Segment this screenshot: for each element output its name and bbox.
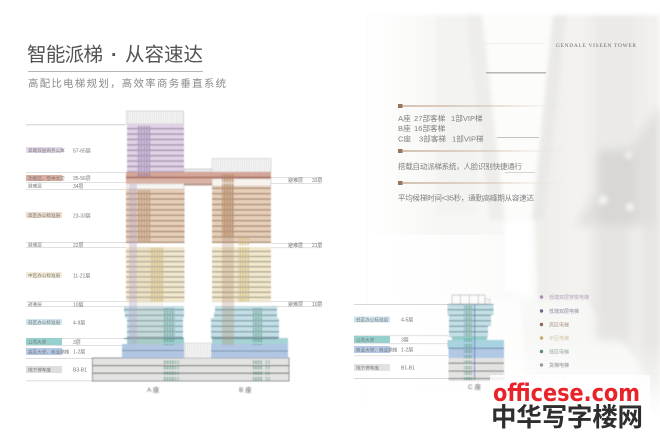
panel: corridor background photo [368, 15, 660, 440]
panel: left floor zone labels: 避难层 [28, 301, 42, 308]
panel: tower C labels: 低区办公标准层 [356, 316, 389, 324]
panel: left floor zone labels: 22层 [73, 243, 84, 249]
text block: elevator counts: 27部客梯 [414, 113, 446, 123]
watermark [490, 375, 650, 440]
legend: VIP电梯 [549, 376, 567, 382]
panel: left floor zone labels: 34层 [73, 184, 84, 190]
panel: left floor zone labels: B3-B1 [73, 368, 87, 374]
tower B tan zone [212, 186, 271, 243]
chart: tower C section [448, 295, 504, 391]
tower B lobby [211, 338, 288, 358]
watermark: 中华写字楼网 [491, 404, 643, 432]
text block: elevator counts: 3部客梯 [419, 134, 446, 144]
tower C elevator dots [464, 305, 472, 380]
elevator shaft A [129, 184, 137, 344]
tower C crown [452, 295, 490, 304]
title: 从容速达 [125, 44, 203, 66]
panel: left floor zone labels: 地下停车库 [28, 366, 51, 374]
chart: tower A and B section [92, 111, 289, 394]
text block: waiting time [398, 181, 562, 202]
elevator dots A upper mid [138, 190, 150, 243]
tower C lobby [448, 337, 504, 358]
panel: tower C labels: 1-2层 [401, 348, 413, 354]
panel: left floor zone labels: 低区办公标准层 [28, 319, 61, 326]
tower A tan zone [126, 189, 184, 243]
elevator dots B upper [222, 174, 234, 236]
panel: left floor zone labels: 3层 [73, 340, 81, 346]
text block: elevator counts: C座 [398, 134, 411, 144]
tower B cream zone [212, 247, 271, 302]
text block: dispatch system: 搭载自动派梯系统，人脸识别快捷通行 [398, 161, 522, 171]
text block: elevator counts: 1部VIP梯 [452, 134, 484, 144]
panel: right refuge floor labels: 21层 [312, 243, 323, 249]
elevator dots B mid [238, 238, 249, 302]
panel: right refuge floor labels: 避难层 [288, 177, 303, 184]
panel: left floor zone labels: 避难层 [28, 182, 42, 190]
tower A blue zone [124, 306, 184, 338]
legend: 中区电梯 [549, 335, 569, 342]
legend: 货梯电梯 [549, 362, 569, 369]
panel: left floor zone labels: 避难层 [28, 242, 42, 248]
panel: right refuge floor labels: 33层 [312, 178, 323, 184]
text block: elevator counts: A座 [398, 113, 411, 123]
elevator dots B low [253, 308, 270, 381]
tower A refuge floor [127, 184, 184, 189]
tower C label: C 座 [468, 382, 482, 391]
panel: right refuge floor labels: 避难层 [288, 301, 303, 308]
brand text: GENDALE VISEEN TOWER [556, 43, 636, 49]
panel: right refuge floor labels: 避难层 [288, 242, 303, 249]
legend: 低端双层电梯 [549, 308, 579, 315]
text block: elevator counts: B座 [398, 123, 411, 133]
tower A lobby [122, 338, 184, 358]
panel: left floor zone labels: 35-56层 [73, 176, 91, 182]
title: · [111, 44, 118, 66]
elevator shaft A low zone [137, 247, 163, 345]
title [27, 44, 203, 66]
elevator shaft B [222, 178, 234, 345]
panel: tower C labels: 4-5层 [401, 318, 413, 324]
text block: elevator counts: 1部VIP梯 [451, 113, 483, 123]
text block: waiting time: 平均候梯时间<35秒，通勤高峰期从容速达 [398, 192, 534, 202]
legend [540, 294, 589, 382]
text block: elevator counts: 16部客梯 [414, 123, 446, 133]
basement podium [92, 358, 289, 381]
elevator dots A low [163, 308, 180, 381]
panel: right refuge floor labels [271, 177, 323, 308]
tower C blue zone [448, 304, 494, 337]
sky lobby pink band [126, 172, 271, 184]
panel: left floor zone labels: 功能区、空中大堂 [28, 175, 65, 182]
panel: left floor zone labels: 公共大堂 [28, 338, 47, 346]
panel: left floor zone labels: 中区办公标准层 [28, 272, 61, 279]
legend: 低区电梯 [549, 348, 569, 356]
connector between towers [184, 169, 212, 358]
panel: tower C labels: 公共大堂 [356, 336, 375, 344]
light spots [598, 151, 634, 211]
panel: tower C labels: B1-B1 [401, 366, 415, 372]
tower A crown [126, 111, 184, 124]
tower C basement [448, 358, 504, 381]
panel: left floor zone labels: 11-21层 [73, 274, 90, 280]
tower B label: B 座 [239, 385, 252, 394]
tower B blue zone [211, 306, 279, 338]
elevator dots A mid [150, 248, 163, 302]
panel: left floor zone labels [26, 124, 126, 381]
legend: 低端双层穿梭电梯 [549, 294, 589, 301]
tower B crown [212, 158, 271, 172]
legend: 高区电梯 [549, 322, 569, 328]
panel: left floor zone labels: 57-65层 [73, 148, 91, 154]
panel: tower C labels [354, 304, 485, 379]
tower C VIP elevator [474, 305, 475, 380]
panel: tower C labels: 3层 [401, 338, 409, 344]
elevator dots A high [137, 126, 150, 177]
panel: left floor zone labels: 4-9层 [73, 320, 85, 326]
panel: left floor zone labels: 高端双层商务公寓 [28, 147, 65, 154]
panel: tower C labels: 商业大堂、商业裙楼 [356, 346, 398, 354]
panel: left floor zone labels: 高区大堂、商业裙楼 [28, 348, 70, 356]
panel: left floor zone labels: 23-33层 [73, 214, 91, 220]
panel: left floor zone labels: 高区办公标准层 [28, 212, 61, 219]
title: 智能派梯 [27, 44, 103, 66]
subtitle: 高配比电梯规划，高效率商务垂直系统 [28, 77, 226, 90]
tower A purple zone [127, 124, 184, 173]
tower B refuge floor [212, 179, 271, 186]
panel: left floor zone labels: 10层 [73, 302, 84, 308]
panel: right refuge floor labels: 10层 [312, 302, 323, 308]
panel: left floor zone labels: 1-2层 [73, 350, 85, 356]
panel: tower C labels: 地下停车库 [356, 364, 379, 372]
text block: elevator counts [398, 104, 562, 144]
text block: dispatch system [398, 149, 562, 171]
tower A label: A 座 [147, 385, 160, 394]
tower A cream zone [126, 247, 184, 302]
title underline [28, 71, 203, 72]
watermark: officese.com [493, 379, 640, 407]
